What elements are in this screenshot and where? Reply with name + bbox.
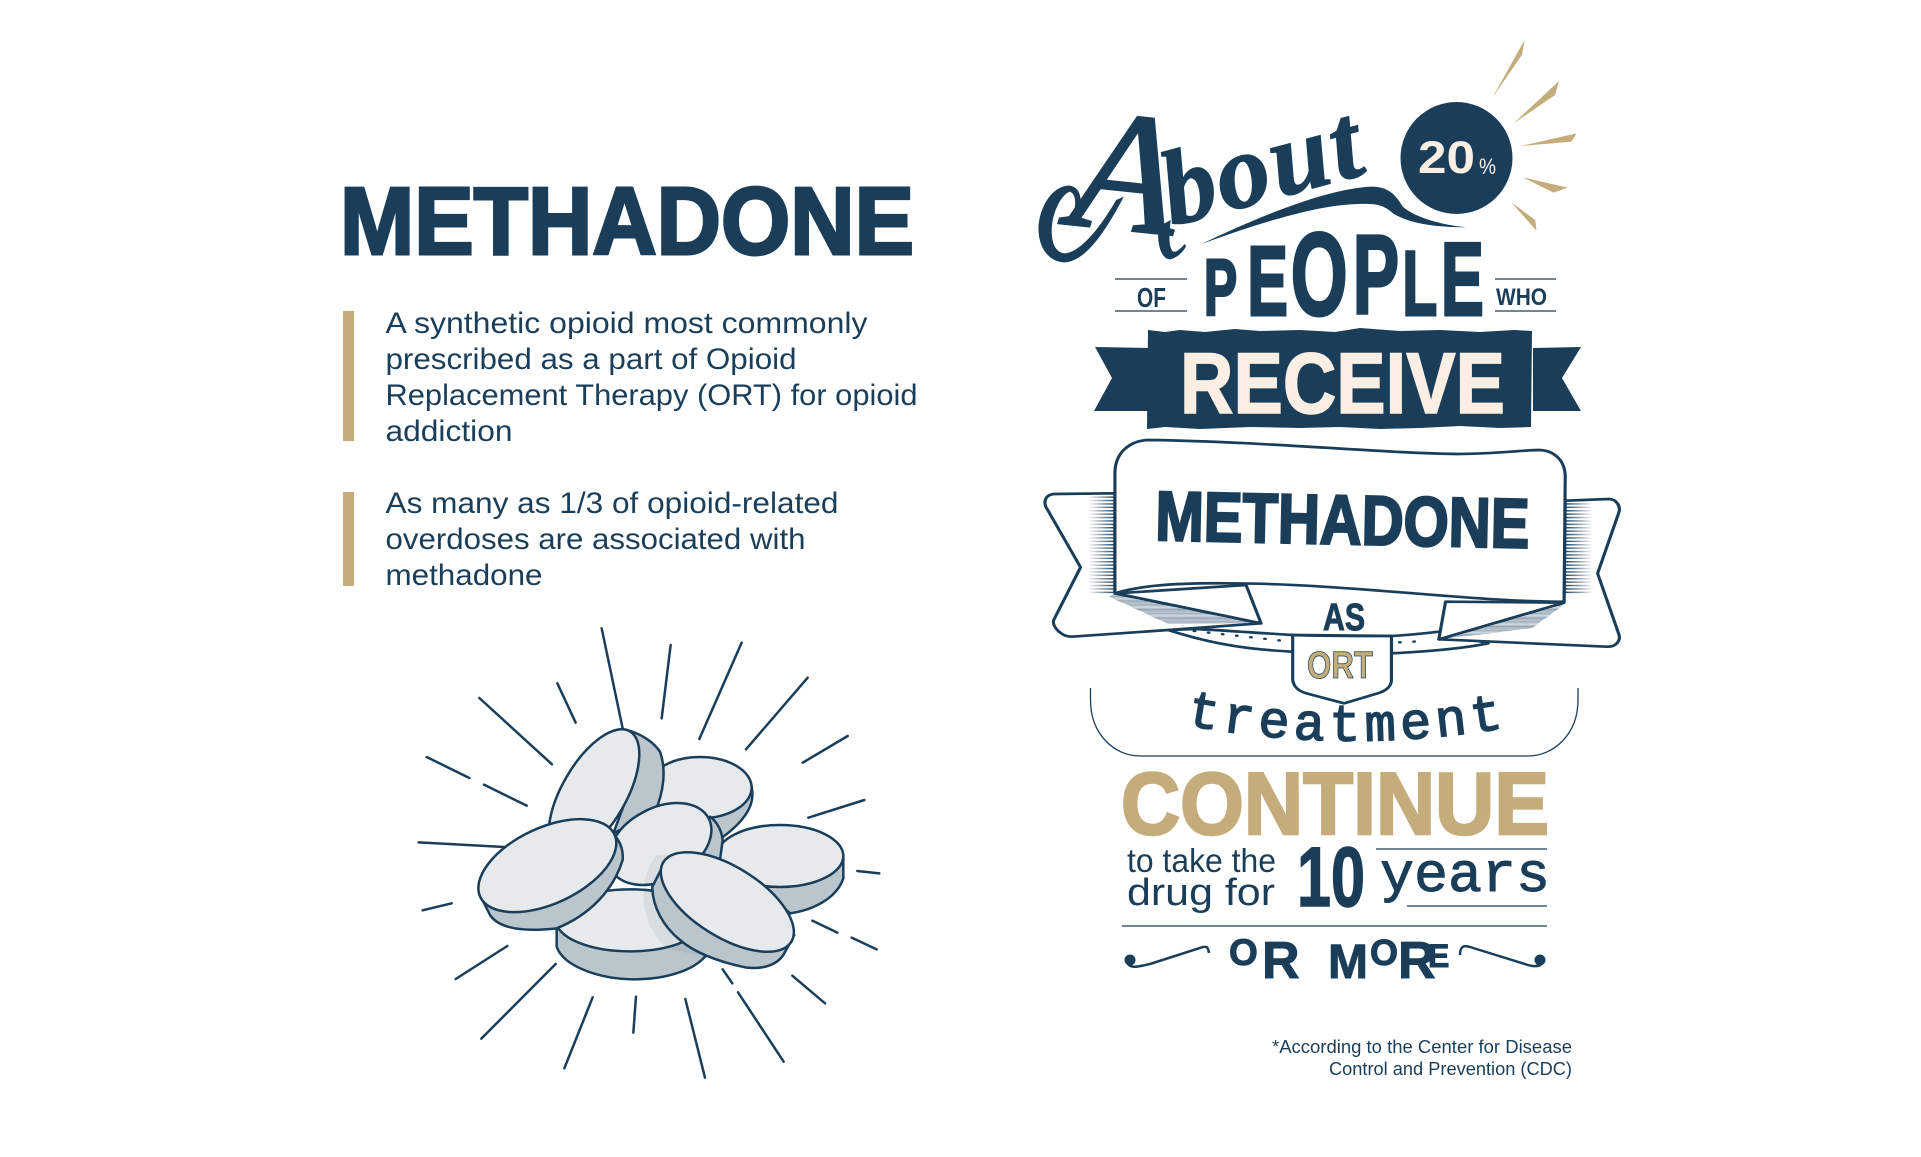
heading: PEOPLE xyxy=(1204,208,1484,340)
label ORT: ORT xyxy=(1307,645,1373,687)
heading: PEOPLE: L xyxy=(1402,233,1437,335)
label: OF with rules: OF xyxy=(1137,282,1166,313)
footnote xyxy=(1272,1037,1572,1079)
ribbon: METHADONE as ORT xyxy=(1045,440,1619,703)
divider rule xyxy=(1122,925,1547,927)
text block: definition: A synthetic opioid most commonly xyxy=(386,307,868,340)
tablet: left xyxy=(464,800,630,931)
heading: PEOPLE: E xyxy=(1247,227,1288,337)
tablet: centre xyxy=(595,786,725,902)
tablet: far right xyxy=(717,825,843,913)
tablet: right front xyxy=(645,832,810,972)
flourish line left xyxy=(1127,947,1209,967)
text block: overdoses xyxy=(343,487,838,592)
tablet: bottom xyxy=(556,889,705,979)
heading: PEOPLE: P xyxy=(1353,212,1399,337)
swash foot xyxy=(1158,220,1186,259)
hatching right xyxy=(1565,498,1593,594)
tablet shadow xyxy=(643,853,733,957)
banner: RECEIVE: RECEIVE xyxy=(1180,336,1505,432)
badge: 20%: 20 xyxy=(1418,132,1475,183)
hatching left xyxy=(1089,496,1114,594)
label AS: AS xyxy=(1323,597,1365,639)
label: OR MORE: R xyxy=(1262,932,1300,990)
label: OR MORE: O xyxy=(1370,932,1398,973)
heading: PEOPLE: O xyxy=(1291,208,1348,340)
number: 10: 10 xyxy=(1297,830,1365,924)
shield xyxy=(1293,635,1391,703)
ribbon main panel xyxy=(1115,440,1565,602)
text block: definition: addiction xyxy=(386,415,512,448)
text block: definition xyxy=(343,307,918,448)
label: OR MORE: M xyxy=(1328,936,1368,989)
text: to take the drug for: to take the xyxy=(1127,842,1276,879)
text block: overdoses: methadone xyxy=(386,559,542,592)
text: to take the drug for: drug for xyxy=(1127,872,1275,914)
label: years with rules: years xyxy=(1380,844,1550,908)
text block: overdoses: overdoses are associated with xyxy=(386,523,806,556)
lower curved band xyxy=(1168,629,1488,653)
title: METHADONE: METHADONE xyxy=(340,168,914,275)
label: WHO with rules: WHO xyxy=(1496,284,1547,311)
right ribbon tail xyxy=(1439,499,1619,647)
inner folds xyxy=(1116,585,1564,639)
flourish end right xyxy=(1534,954,1546,966)
hatching under right fold xyxy=(1439,603,1564,639)
hatching under left fold xyxy=(1109,593,1261,624)
flourish right xyxy=(1460,946,1542,966)
frame around treatment xyxy=(1090,688,1578,756)
label: OR MORE: O xyxy=(1229,932,1258,973)
swash of the capital xyxy=(1038,186,1124,262)
heading: About script xyxy=(1038,72,1377,273)
flourish end left xyxy=(1124,954,1136,966)
text: to take the drug for xyxy=(1127,842,1276,914)
heading: CONTINUE: CONTINUE xyxy=(1121,754,1549,853)
text block: definition: prescribed as a part of Opioid xyxy=(386,343,796,376)
stitched dots xyxy=(1194,631,1427,642)
badge: 20%: % xyxy=(1479,154,1496,179)
label: OR MORE: E xyxy=(1428,938,1449,974)
label: OF with rules xyxy=(1115,279,1187,313)
flourish under About xyxy=(1202,187,1466,244)
heading: PEOPLE: E xyxy=(1441,222,1484,338)
text block: definition: Replacement Therapy (ORT) for opioid xyxy=(386,379,918,412)
word: About: bout xyxy=(1148,82,1377,248)
badge: 20% xyxy=(1400,102,1512,214)
ribbon text METHADONE: METHADONE xyxy=(1155,477,1530,563)
word: About: A xyxy=(1054,72,1189,273)
footnote: Control and Prevention (CDC) xyxy=(1329,1059,1572,1079)
footnote: *According to the Center for Disease xyxy=(1272,1037,1572,1057)
icon: sun rays xyxy=(1493,40,1577,231)
illustration: pile of methadone tablets with rays xyxy=(419,628,879,1078)
left ribbon tail xyxy=(1045,493,1261,637)
heading: PEOPLE: P xyxy=(1204,244,1237,333)
tablet: upper left xyxy=(530,715,664,871)
tablet: back right xyxy=(648,757,752,837)
label: treatment: treatment xyxy=(1194,692,1499,742)
text block: overdoses: As many as 1/3 of opioid-related xyxy=(386,487,838,520)
label: OR MORE: R xyxy=(1398,932,1436,990)
